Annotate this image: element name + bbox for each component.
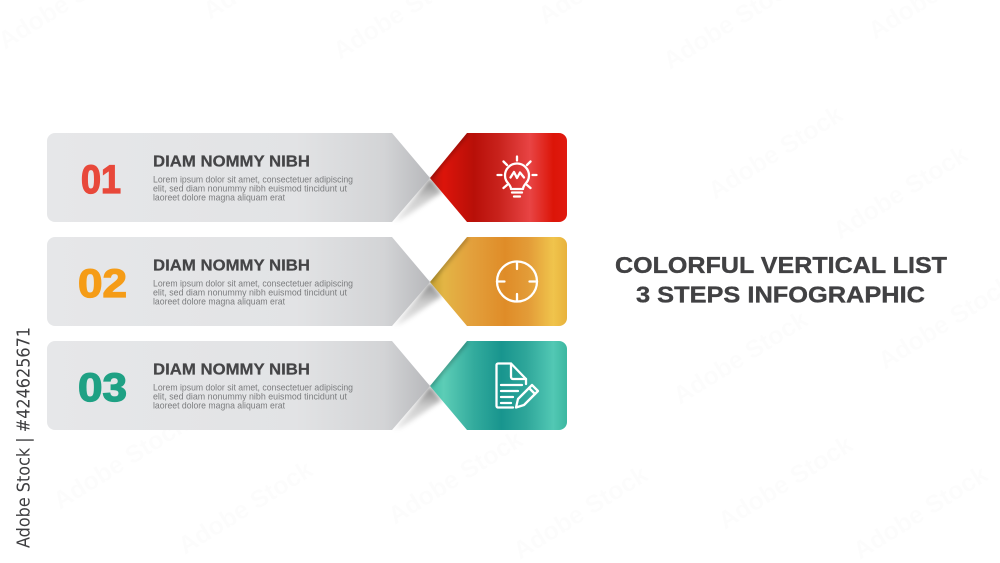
watermark pattern: Adobe Stock	[383, 425, 528, 530]
grey label panel 3	[47, 341, 430, 430]
tab fold shade 1	[430, 133, 467, 178]
icon: document with pencil	[496, 364, 538, 408]
watermark pattern: Adobe Stock	[703, 100, 848, 205]
fold shadow 1	[394, 178, 442, 222]
stock credit text: Adobe Stock | #424625671	[14, 327, 34, 548]
watermark pattern: Adobe Stock	[173, 455, 318, 560]
title	[615, 252, 947, 308]
body text 1: elit, sed diam nonummy nibh euismod tincidunt ut	[153, 184, 347, 194]
body text 2: laoreet dolore magna aliquam erat	[153, 296, 285, 306]
watermark pattern: Adobe Stock	[668, 305, 813, 410]
gold tab 2	[430, 237, 567, 326]
fold shadow 2	[394, 282, 442, 326]
tab fold shade 2	[430, 237, 467, 282]
body text 3: Lorem ipsum dolor sit amet, consectetuer adipiscing	[153, 382, 353, 392]
number 03: 03	[78, 366, 127, 410]
watermark pattern: Adobe Stock	[848, 460, 993, 563]
body text 2: Lorem ipsum dolor sit amet, consectetuer adipiscing	[153, 278, 353, 288]
body text 2: elit, sed diam nonummy nibh euismod tincidunt ut	[153, 288, 347, 298]
grey label panel 2	[47, 237, 430, 326]
body text 1: laoreet dolore magna aliquam erat	[153, 192, 285, 202]
row 3	[47, 341, 567, 430]
fold shadow 3	[394, 386, 442, 430]
red tab 1	[430, 133, 567, 222]
heading 3: DIAM NOMMY NIBH	[153, 362, 310, 378]
watermark pattern: Adobe Stock	[48, 410, 193, 515]
icon: target	[497, 262, 537, 302]
number 01: 01	[81, 158, 121, 202]
tab fold shade 3	[430, 341, 467, 386]
heading 2: DIAM NOMMY NIBH	[153, 258, 310, 274]
watermark pattern: Adobe Stock	[508, 460, 653, 563]
title: 3 STEPS INFOGRAPHIC	[636, 282, 925, 308]
grey label panel 1	[47, 133, 430, 222]
body text 3: elit, sed diam nonummy nibh euismod tincidunt ut	[153, 392, 347, 402]
icon: light bulb	[498, 156, 536, 196]
watermark pattern: Adobe Stock	[713, 430, 858, 535]
number 02: 02	[78, 262, 127, 306]
title: COLORFUL VERTICAL LIST	[615, 252, 947, 278]
body text 1: Lorem ipsum dolor sit amet, consectetuer adipiscing	[153, 174, 353, 184]
body text 3: laoreet dolore magna aliquam erat	[153, 400, 285, 410]
row 2	[47, 237, 567, 326]
watermark pattern: Adobe Stock	[828, 140, 973, 245]
teal tab 3	[430, 341, 567, 430]
row 1	[47, 133, 567, 222]
heading 1: DIAM NOMMY NIBH	[153, 154, 310, 170]
